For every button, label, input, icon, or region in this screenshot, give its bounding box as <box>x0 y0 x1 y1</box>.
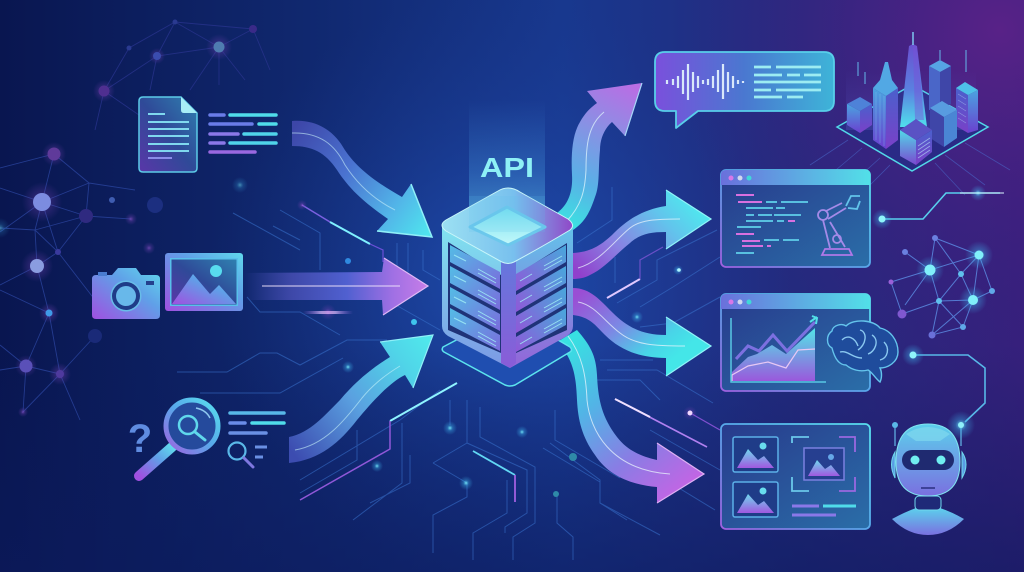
beam of light <box>469 100 545 230</box>
API server <box>442 100 573 386</box>
text lines: search <box>230 413 284 433</box>
building far right <box>956 88 968 133</box>
server top <box>442 188 573 264</box>
thumbnail focus frame <box>792 437 855 491</box>
glowing connector: code to network <box>872 185 1004 229</box>
small antennas <box>858 62 865 84</box>
icon: brain <box>828 321 898 382</box>
central spire <box>900 44 927 127</box>
text lines: document <box>210 115 276 152</box>
building front <box>900 130 916 165</box>
input arrow: image <box>245 258 428 315</box>
window: images panel <box>721 424 870 529</box>
robot antennas <box>895 425 961 446</box>
robot head <box>896 424 960 496</box>
API label: API <box>480 152 534 183</box>
transcript lines <box>754 67 821 97</box>
server base platform <box>442 312 572 386</box>
server right wall <box>510 225 573 368</box>
audio waveform <box>667 64 743 100</box>
input arrow: document <box>292 121 432 237</box>
output arrow: speech <box>557 83 642 230</box>
speech bubble panel <box>655 52 834 128</box>
right network constellation <box>888 235 995 338</box>
isometric city <box>810 32 1010 195</box>
input icon: image <box>165 253 243 311</box>
server left wall <box>442 225 510 368</box>
robot arm icon <box>818 196 860 255</box>
caption lines <box>792 506 856 515</box>
window: chart panel <box>721 294 870 391</box>
icon: robot <box>892 411 975 535</box>
input icon: magnifier <box>139 400 218 476</box>
input icon: camera <box>92 268 160 319</box>
window: code and robot arm panel <box>721 170 870 267</box>
output arrow: chart <box>573 288 711 376</box>
robot ears <box>892 452 966 478</box>
server right racks <box>516 243 567 353</box>
circuit traces <box>177 187 720 560</box>
code lines <box>736 195 808 253</box>
left network constellation <box>0 20 270 420</box>
thumbnail bottom <box>733 482 778 517</box>
building mid right <box>930 108 944 147</box>
sparkle lights <box>297 200 720 502</box>
robot shoulders and neck <box>892 508 964 535</box>
output arrow: images <box>557 330 704 503</box>
input arrow: search <box>289 335 433 463</box>
rack lights <box>454 255 562 346</box>
output arrow: code <box>573 190 711 279</box>
building back right <box>929 66 940 110</box>
area chart <box>732 328 815 381</box>
input icon: question mark: ? <box>128 417 152 461</box>
input icon: document <box>139 97 197 172</box>
server left racks <box>448 242 501 353</box>
server pillar <box>501 258 516 368</box>
building tall left <box>873 88 886 149</box>
building short left <box>847 104 860 133</box>
city base and traces <box>837 85 988 171</box>
thumbnail top <box>733 437 778 472</box>
glowing connector: brain to robot <box>902 344 985 422</box>
small magnifier <box>228 442 267 467</box>
